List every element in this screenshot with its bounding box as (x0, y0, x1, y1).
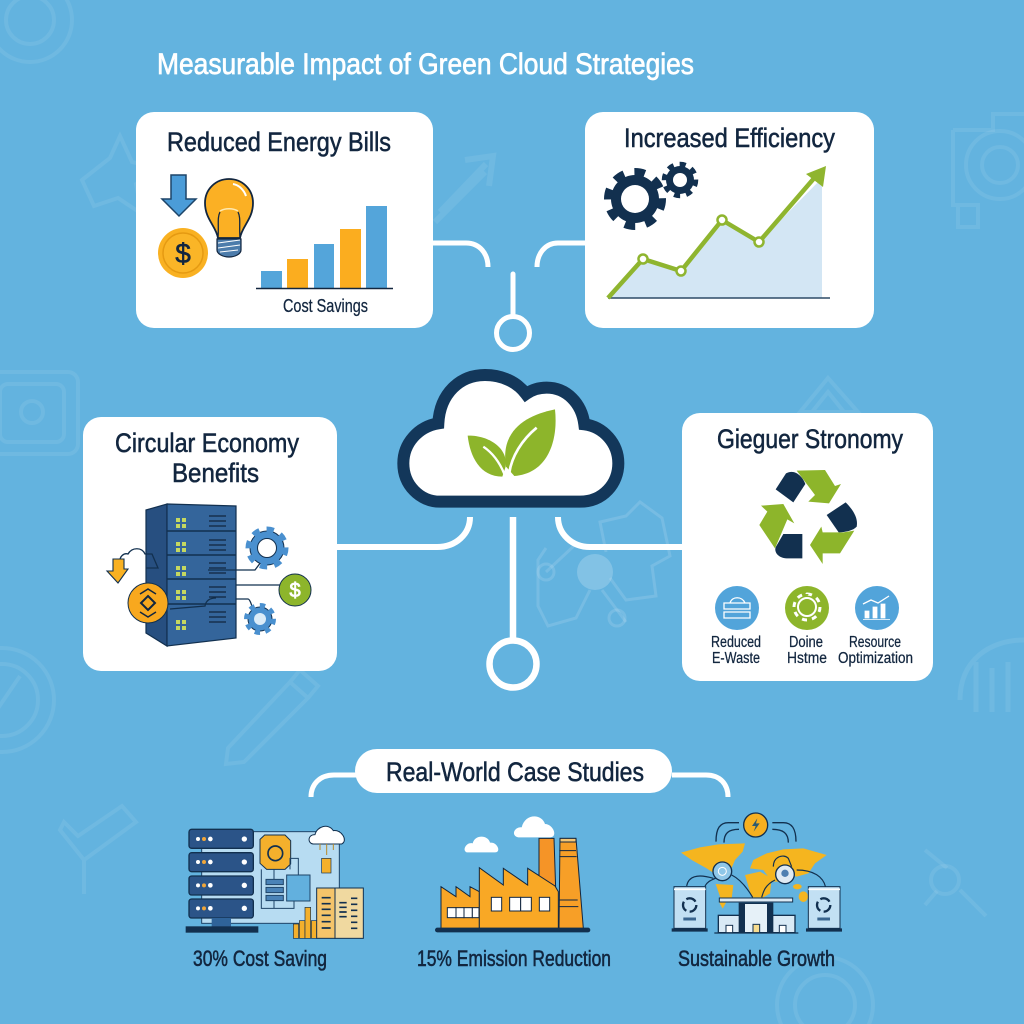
central cloud with leaves (403, 375, 618, 502)
label: resource optimization: Optimization (838, 650, 913, 667)
heading: circular economy benefits: Benefits (172, 458, 259, 488)
panel: recycling (682, 413, 933, 681)
panel: reduced energy bills (136, 112, 433, 328)
connectors (337, 243, 682, 688)
label: resource optimization: Resource (849, 634, 901, 651)
label: reduced e-waste (711, 634, 761, 667)
icon: server rack (146, 504, 236, 646)
heading: reduced energy bills: Reduced Energy Bills (167, 127, 391, 157)
heading: circular economy benefits (115, 428, 299, 488)
icon: resource optimization (855, 586, 899, 630)
icons: gears, coin and connecting lines: $ (289, 580, 301, 602)
case study: 30% cost saving (186, 826, 363, 971)
icon: factory (435, 816, 590, 932)
label: sustainable growth: Sustainable Growth (678, 946, 835, 971)
icon: green gear (785, 586, 829, 630)
case study: sustainable growth (672, 813, 842, 971)
icon: recycle symbol (759, 470, 857, 564)
case study: 15% emission reduction (417, 816, 611, 971)
label: reduced e-waste: E-Waste (712, 650, 760, 667)
icon: dollar coin (158, 228, 208, 278)
label: middle item: Hstme (787, 650, 827, 667)
panel: increased efficiency (585, 112, 874, 328)
label: reduced e-waste: Reduced (711, 634, 761, 651)
chart label: Cost Savings (283, 296, 368, 316)
icon: reduced e-waste (715, 586, 759, 630)
heading: recycling panel: Gieguer Stronomy (717, 424, 903, 454)
icon: dollar coin: $ (175, 238, 191, 269)
heading: circular economy benefits: Circular Economy (115, 428, 299, 458)
label: 15% emission reduction: 15% Emission Reduction (417, 946, 611, 971)
label: middle item: Doine (789, 634, 823, 651)
label: middle item (787, 634, 827, 667)
line chart: efficiency growth (608, 166, 830, 298)
panel: circular economy benefits (83, 417, 337, 671)
icon: leaves (468, 409, 556, 477)
icon: data center (186, 826, 363, 938)
label: 30% cost saving: 30% Cost Saving (193, 946, 327, 971)
section heading: real-world case studies: Real-World Case Studies (386, 757, 644, 787)
icon: light bulb (205, 179, 253, 257)
icons: gears, coin and connecting lines (107, 530, 311, 632)
heading: increased efficiency: Increased Efficiency (624, 123, 835, 153)
label: resource optimization (838, 634, 913, 667)
title: Measurable Impact of Green Cloud Strategies (157, 48, 694, 81)
section heading: real-world case studies (355, 749, 672, 793)
bar chart: cost savings (256, 206, 393, 288)
icon: large gear (608, 172, 662, 226)
section bracket (311, 775, 728, 797)
icon: down arrow (162, 175, 196, 216)
icon: world map with recycling bins (672, 813, 842, 933)
icon: small gear (664, 164, 696, 196)
